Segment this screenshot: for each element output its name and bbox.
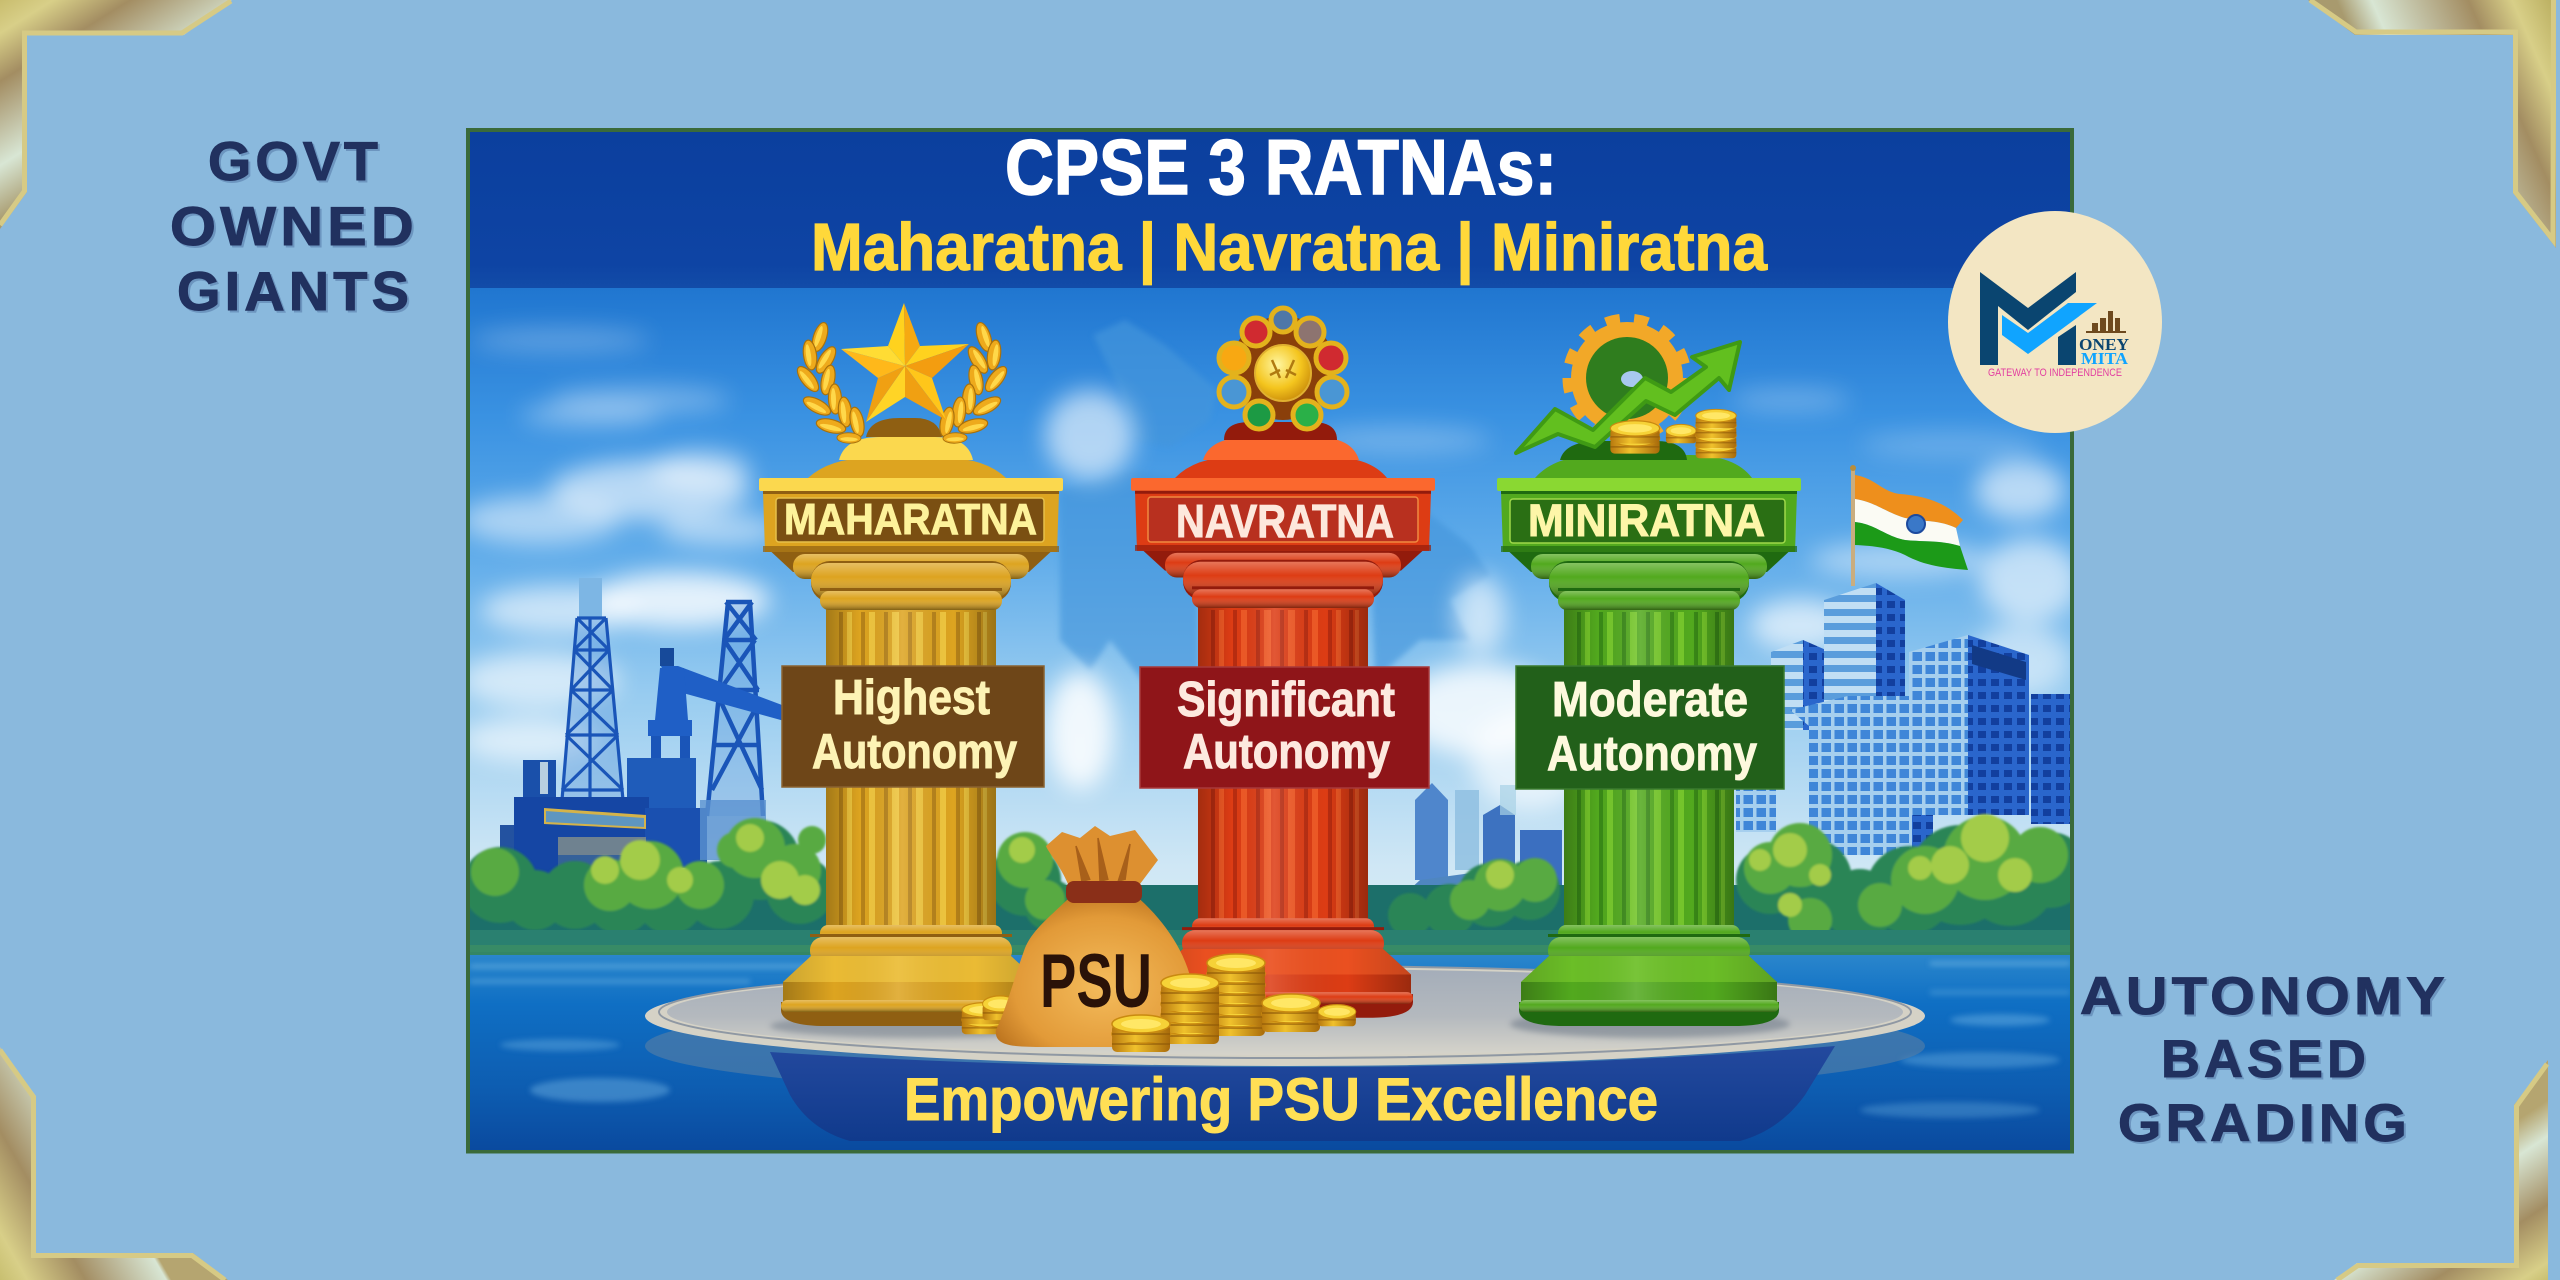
label: Moderate [1552, 673, 1748, 727]
pillar: Maharatna [759, 303, 1063, 1026]
label [1516, 666, 1784, 789]
laurel [794, 321, 1010, 444]
picture frame [468, 130, 2072, 1152]
icon: city [2086, 311, 2126, 333]
pillar body [1131, 478, 1435, 1018]
dome [1535, 441, 1752, 478]
platform [645, 966, 1925, 1078]
title: CPSE 3 RATNAs: [1005, 123, 1557, 211]
pillar: Miniratna [1497, 320, 1801, 1026]
refinery [500, 578, 790, 887]
label: Highest [833, 671, 990, 725]
logo: Money Mita: ONEY [2079, 335, 2129, 354]
logo: Money Mita: GATEWAY TO INDEPENDENCE [1988, 367, 2122, 379]
logo: Money Mita [1948, 211, 2162, 433]
label: Autonomy [1547, 727, 1757, 781]
plaque: NAVRATNA [1176, 495, 1394, 547]
side caption: Govt owned giants [170, 131, 418, 322]
coins [1610, 409, 1736, 458]
label: Significant [1177, 673, 1395, 727]
pillar body [759, 478, 1063, 1026]
side caption: Autonomy based grading: BASED [2161, 1030, 2370, 1089]
panel: main illustration [460, 123, 2088, 1152]
dome [1175, 422, 1387, 478]
plaque: MAHARATNA [784, 495, 1037, 544]
ground foliage [462, 814, 2088, 960]
side caption: Govt owned giants: GOVT [208, 131, 382, 192]
side caption: Autonomy based grading: AUTONOMY [2080, 967, 2449, 1026]
city skyline [1369, 583, 2070, 930]
label [1140, 667, 1429, 788]
side caption: Autonomy based grading: GRADING [2118, 1094, 2411, 1153]
dome [808, 418, 1006, 478]
corner: bottom left [0, 1047, 228, 1280]
pillar: Navratna [1131, 308, 1435, 1018]
side caption: Govt owned giants: GIANTS [177, 261, 413, 322]
faint world map [1060, 320, 1490, 690]
corner: bottom right [2334, 1060, 2548, 1280]
logo: Money Mita: MITA [2081, 349, 2129, 368]
plaque: MINIRATNA [1528, 495, 1765, 546]
sky [470, 288, 2070, 885]
banner ribbon [770, 1046, 1835, 1141]
money bag [962, 826, 1193, 1047]
money bag: PSU [1040, 939, 1152, 1024]
header band [470, 132, 2070, 288]
icon: rising arrow [1516, 342, 1740, 453]
pillar body [1497, 478, 1801, 1026]
icon: gear [1569, 320, 1685, 436]
subtitle: Maharatna | Navratna | Miniratna [811, 210, 1768, 286]
banner text: Empowering PSU Excellence [904, 1066, 1658, 1133]
icon: nine gems [1219, 308, 1347, 429]
label [782, 666, 1044, 787]
corner: top left [0, 0, 232, 229]
label: Autonomy [812, 725, 1017, 779]
clouds [460, 328, 2080, 810]
icon: M mark [1980, 272, 2097, 365]
label: Autonomy [1183, 725, 1390, 779]
left coins [961, 995, 1009, 1034]
icon: star [841, 303, 969, 422]
side caption: Govt owned giants: OWNED [170, 196, 418, 257]
coin stacks [1112, 954, 1356, 1052]
water [470, 955, 2070, 1150]
flag: India [1850, 465, 1968, 586]
corner: top right [2308, 0, 2556, 248]
side caption: Autonomy based grading [2080, 967, 2449, 1153]
